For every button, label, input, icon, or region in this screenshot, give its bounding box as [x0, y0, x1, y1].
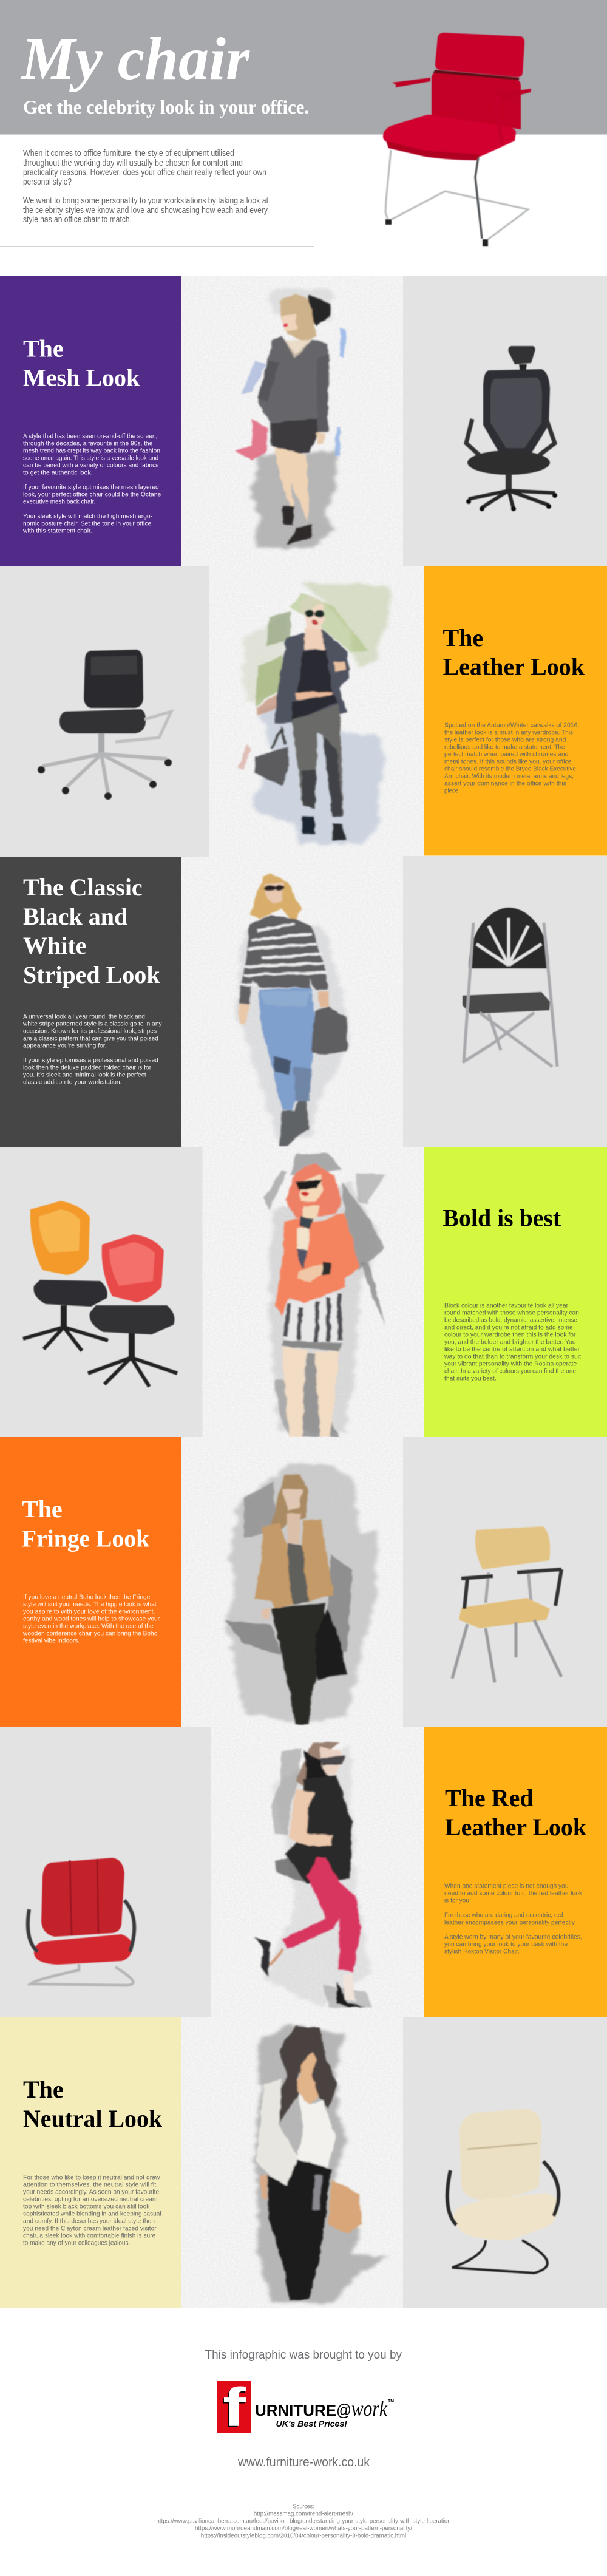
figure: woman in red trousers	[254, 1742, 371, 2008]
logo: furniture at work: URNITURE	[255, 2401, 336, 2419]
text: fringe look: festival vibe indoors.	[23, 1637, 80, 1644]
text: neutral look: attention to themselves, the neutral style will fit	[23, 2181, 156, 2188]
text: red leather look: A style worn by many of your favourite celebrities,	[444, 1933, 582, 1940]
heading: mesh look: The	[23, 335, 64, 362]
text: neutral look: top with sleek black bottoms you can still look	[23, 2203, 150, 2210]
text: bold is best: be described as bold, dynamic, assertive, intense	[444, 1316, 577, 1324]
text: red leather look: For those who are daring and eccentric, red	[444, 1911, 563, 1918]
chair: black leather	[38, 650, 172, 800]
text: striped look: If your style epitomises a professional and poised	[23, 1056, 158, 1064]
panel: leather look	[424, 566, 607, 856]
text: bold is best: colour to your wardrobe then this is the look for	[444, 1331, 576, 1338]
heading: striped look: White	[23, 932, 86, 959]
icon: red chair	[383, 33, 531, 246]
heading: neutral look: The	[23, 2076, 64, 2103]
text: striped look: occasion. Known for its professional look, stripes	[23, 1027, 157, 1035]
heading: leather look: Leather Look	[443, 653, 585, 681]
chair: red executive	[28, 1858, 134, 1985]
figure: woman in leather jacket	[238, 583, 392, 844]
text: red leather look: is for you.	[444, 1897, 471, 1904]
panel: striped look	[0, 857, 181, 1147]
text: bold is best: and direct, and if you’re not afraid to add some	[444, 1324, 573, 1331]
text: red leather look	[444, 1882, 583, 1955]
logo: furniture at work: work	[351, 2396, 388, 2421]
text: neutral look: and comfy. If this describes your ideal style then	[23, 2217, 155, 2224]
heading: red leather look: The Red	[445, 1784, 534, 1812]
heading: striped look: The Classic	[23, 874, 143, 901]
sources	[156, 2503, 451, 2539]
heading: neutral look: Neutral Look	[23, 2105, 163, 2132]
section 2: leather look	[0, 566, 607, 857]
intro text: throughout the working day will usually be chosen for comfort and	[23, 158, 243, 168]
title: My chair	[20, 25, 250, 92]
text: neutral look: chair, a sleek look with comfortable finish is sure	[23, 2232, 155, 2239]
heading: leather look: The	[443, 624, 483, 651]
text: neutral look: to make any of your colleagues jealous.	[23, 2239, 130, 2246]
text: leather look	[444, 721, 579, 794]
text: mesh look: to get the authentic look.	[23, 469, 93, 477]
text: mesh look: through the decades, a favourite in the 90s, the	[23, 440, 153, 447]
logo: furniture at work: TM	[388, 2399, 394, 2404]
heading: leather look	[443, 624, 585, 681]
figure: woman in coral jacket	[263, 1154, 385, 1437]
chair: orange	[23, 1201, 108, 1351]
text: bold is best: Block colour is another favourite look all year	[444, 1302, 568, 1309]
text: striped look: are a classic pattern that can give you that poised	[23, 1035, 158, 1042]
text: mesh look: Your sleek style will match the high mesh ergo-	[23, 513, 152, 520]
sources: https://www.pavilioncanberra.com.au/feed/pavilion-blog/understanding-your-style-personality-with-style-liberation	[156, 2517, 451, 2524]
chair: red	[88, 1234, 177, 1387]
text: leather look: Spotted on the Autumn/Winter catwalks of 2016,	[444, 721, 579, 729]
text: red leather look: When one statement piece is not enough you	[444, 1882, 569, 1889]
logo: furniture at work	[217, 2377, 394, 2439]
text: leather look: rebellious and like to make a statement. The	[444, 743, 565, 750]
text: mesh look: can be paired with a variety of colours and fabrics	[23, 462, 158, 469]
text: neutral look: For those who like to keep it neutral and not draw	[23, 2173, 160, 2181]
text: red leather look: you can bring your look to your desk with the	[444, 1940, 568, 1948]
text: bold is best: chair. In a variety of colours you can find the one	[444, 1367, 576, 1375]
text: bold is best: that suits you best.	[444, 1375, 497, 1382]
chair: mesh back	[466, 346, 557, 511]
sources: Sources:	[293, 2503, 314, 2510]
text: mesh look: with this statement chair.	[22, 528, 92, 535]
text: fringe look: you aspire to with your love of the environment,	[23, 1608, 155, 1615]
chair: orange and red mesh chairs	[23, 1201, 177, 1387]
intro text: practicality reasons. However, does your office chair really reflect your own	[23, 168, 266, 177]
text: bold is best: like to be the centre of attention and what better	[444, 1345, 580, 1353]
panel: neutral look	[0, 2017, 181, 2308]
text: striped look	[22, 1013, 162, 1086]
text: leather look: style is perfect for those who are strong and	[444, 736, 566, 743]
text: red leather look: need to add some colour to it; the red leather look	[444, 1889, 583, 1897]
heading: mesh look	[23, 335, 140, 392]
heading: fringe look	[22, 1495, 150, 1552]
text: fringe look: style even in the workplace. With the use of the	[23, 1622, 154, 1630]
figure: woman in cream blazer	[255, 2024, 387, 2303]
text: leather look: assert your dominance in the office with this	[444, 780, 566, 787]
sources: https://insideoutstyleblog.com/2010/04/colour-personality-3-bold-dramatic.html	[201, 2532, 406, 2539]
text: mesh look: A style that has been seen on-and-off the screen,	[23, 433, 157, 440]
text: neutral look: you need the Clayton cream leather faced visitor	[23, 2224, 157, 2232]
text: mesh look: If your favourite style optimises the mesh layered	[23, 484, 159, 491]
text: fringe look: earthy and wood tones will help to showcase your	[23, 1615, 160, 1622]
text: mesh look: nomic posture chair. Set the tone in your office	[23, 520, 151, 528]
text: mesh look	[22, 433, 161, 535]
text: bold is best: way to do that than to transform your desk to suit	[444, 1353, 581, 1360]
text: neutral look: celebrities, opting for an oversized neutral cream	[23, 2195, 158, 2203]
text: fringe look: style will suit your needs. The hippie look is what	[23, 1600, 157, 1608]
text: striped look: classic addition to your workstation.	[23, 1078, 121, 1086]
panel: mesh look	[0, 276, 181, 566]
text: striped look: white stripe patterned style is a classic go to in any	[22, 1020, 162, 1027]
section 6: red leather look	[0, 1727, 607, 2017]
section 7: neutral look	[0, 2017, 607, 2308]
logo: furniture at work: UK's Best Prices!	[276, 2419, 348, 2428]
text: mesh look: scene once again. This style is a versatile look and	[23, 455, 158, 462]
heading: striped look	[23, 874, 160, 988]
text: neutral look: your needs accordingly. As seen on your favourite	[23, 2188, 159, 2195]
subtitle: Get the celebrity look in your office.	[23, 96, 309, 118]
heading: fringe look: The	[22, 1495, 63, 1523]
logo: furniture at work: f	[223, 2377, 246, 2438]
text: striped look: look then the deluxe padded folded chair is for	[23, 1064, 152, 1071]
chair: folding	[463, 908, 557, 1067]
intro text: the celebrity styles we know and love and showcasing how each and every	[23, 205, 268, 216]
text: fringe look: wooden conference chair you can bring the Boho	[22, 1630, 158, 1637]
text: mesh look: executive mesh back chair.	[23, 498, 95, 506]
credit line: This infographic was brought to you by	[205, 2348, 402, 2362]
text: red leather look: stylish Hoxton Visitor Chair.	[444, 1948, 520, 1955]
chair: wooden conference	[452, 1526, 561, 1682]
header band	[0, 0, 607, 134]
text: mesh look: look, your perfect office chair could be the Octane	[23, 491, 161, 498]
figure: woman in mesh dress	[236, 288, 345, 548]
heading: striped look: Black and	[23, 903, 127, 930]
text: bold is best: your vibrant personality with the Rosina operate	[444, 1360, 577, 1367]
website url: www.furniture-work.co.uk	[237, 2456, 370, 2469]
heading: red leather look: Leather Look	[445, 1813, 587, 1841]
intro text: personal style?	[23, 177, 72, 187]
panel: red leather look	[424, 1727, 607, 2017]
heading: striped look: Striped Look	[23, 961, 160, 988]
text: bold is best: you, and the bolder and brighter the better. You	[444, 1338, 576, 1345]
text: bold is best	[444, 1302, 581, 1382]
text: leather look: metal tones. If this sounds like you, your office	[444, 758, 572, 765]
text: leather look: piece.	[444, 787, 460, 794]
panel: bold is best	[424, 1147, 607, 1437]
intro text: style has an office chair to match.	[23, 214, 132, 225]
section 1: mesh look	[0, 276, 607, 566]
sources: http://messmag.com/trend-alert-mesh/	[254, 2510, 353, 2517]
text: leather look: chair should resemble the Bryce Black Executive	[444, 765, 576, 772]
intro text: We want to bring some personality to your workstations by taking a look at	[23, 195, 269, 206]
section 3: classic striped look	[0, 856, 607, 1147]
section 5: fringe look	[0, 1437, 607, 1727]
sources: https://www.monroeandmain.com/blog/real-women/whats-your-pattern-personality/	[195, 2524, 412, 2532]
heading: neutral look	[23, 2076, 163, 2132]
intro text	[23, 148, 269, 225]
text: striped look: you. It’s sleek and minimal look is the perfect	[23, 1071, 146, 1078]
heading: fringe look: Fringe Look	[22, 1525, 150, 1552]
text: mesh look: mesh trend has crept its way back into the fashion	[23, 447, 160, 455]
heading: mesh look: Mesh Look	[23, 364, 140, 392]
logo: furniture at work: f	[222, 2379, 245, 2439]
chair: cream visitor	[447, 2109, 558, 2273]
text: red leather look: leather encompasses your personality perfectly.	[444, 1918, 576, 1926]
section 4: bold is best	[0, 1147, 607, 1437]
heading: bold is best: Bold is best	[443, 1204, 561, 1231]
text: striped look: appearance you’re striving for.	[23, 1042, 107, 1049]
panel: fringe look	[0, 1437, 181, 1727]
text: leather look: Armchair. With its modern metal arms and legs,	[444, 772, 574, 780]
text: fringe look: If you love a neutral Boho look then the Fringe	[23, 1593, 151, 1600]
logo: furniture at work: @	[336, 2401, 351, 2419]
text: neutral look: sophisticated while blending in and keeping casual	[23, 2210, 161, 2217]
figure: woman in fringe jacket	[225, 1463, 376, 1724]
text: neutral look	[23, 2173, 161, 2246]
text: bold is best: round matched with those whose personality can	[444, 1309, 579, 1316]
figure: woman in striped sweater	[236, 873, 350, 1147]
text: fringe look	[22, 1593, 160, 1644]
intro text: When it comes to office furniture, the style of equipment utilised	[23, 148, 234, 158]
text: leather look: the leather look is a must in any wardrobe. This	[444, 729, 573, 736]
text: leather look: perfect match when paired with chromes and	[444, 750, 569, 758]
text: striped look: A universal look all year round, the black and	[23, 1013, 145, 1020]
heading: red leather look	[445, 1784, 587, 1841]
